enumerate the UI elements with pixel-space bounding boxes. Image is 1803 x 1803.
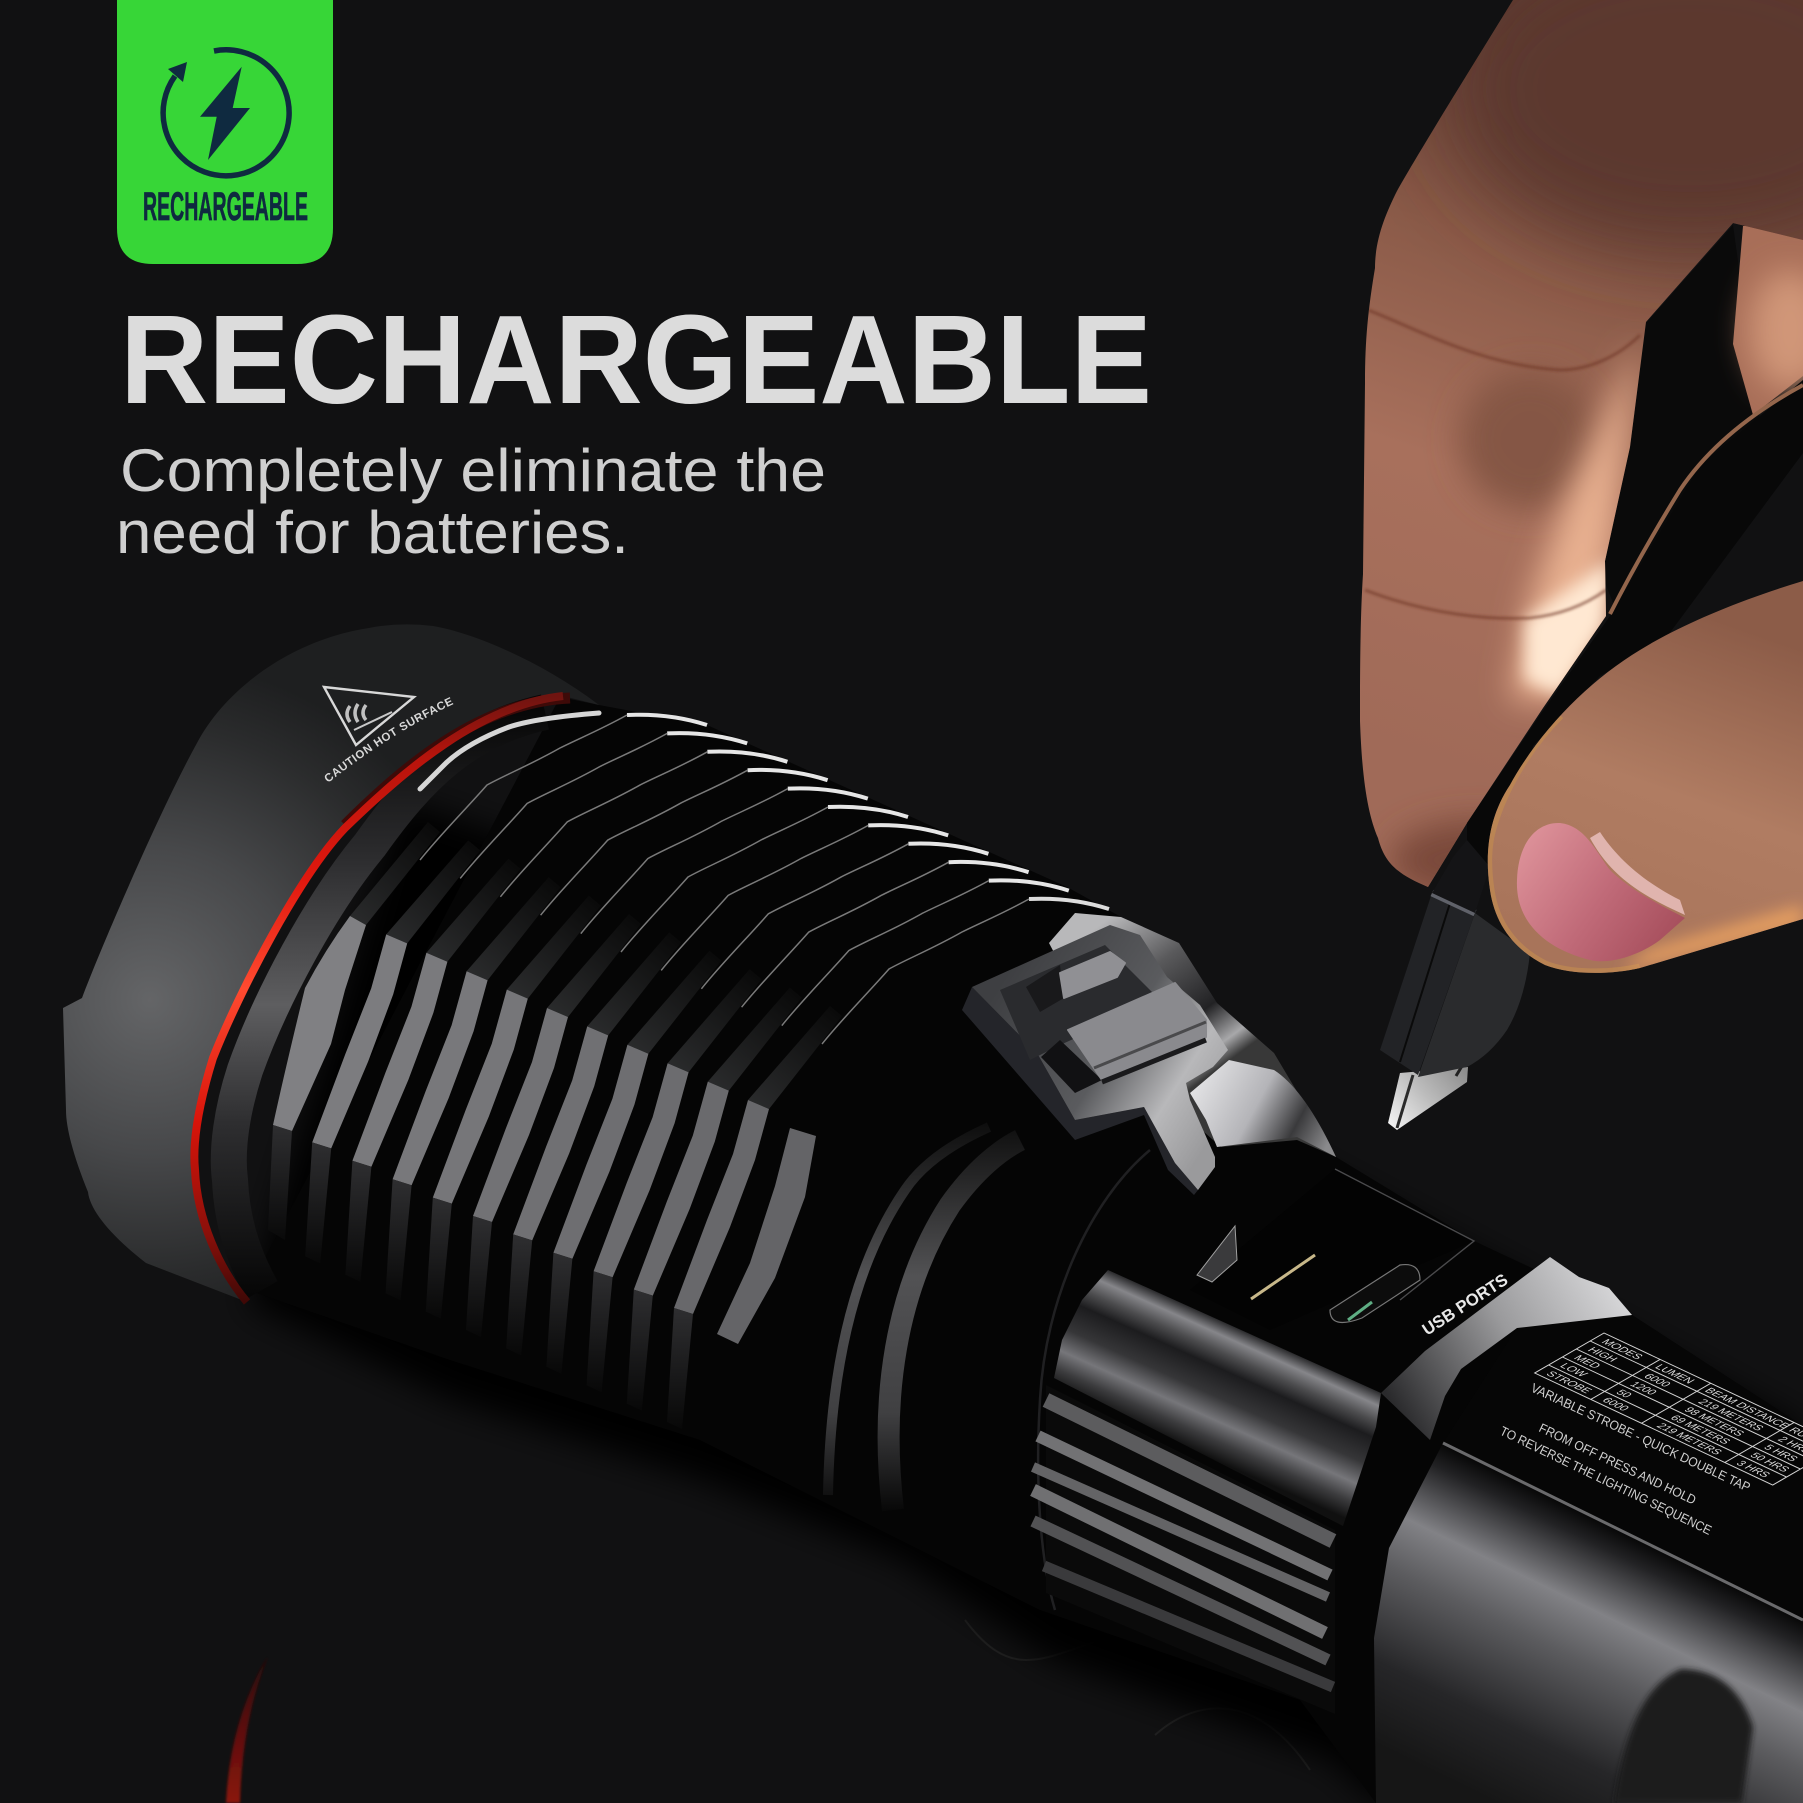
subtitle: need for batteries. [116, 499, 629, 566]
hand holding cable [1350, 0, 1803, 1130]
switch plate [962, 925, 1228, 1195]
fingernail [1517, 823, 1685, 961]
large power button [1041, 983, 1206, 1093]
label plate on barrel [1443, 1315, 1803, 1620]
mode specification table: 1200 [1627, 1380, 1659, 1397]
grooved section [1033, 1385, 1335, 1714]
mode specification table: 5 HRS [1761, 1443, 1800, 1463]
mode specification table: HIGH [1584, 1346, 1620, 1364]
barrel oval shadow [1614, 1669, 1753, 1803]
USB PORTS label: USB PORTS [1419, 1270, 1511, 1339]
flashlight body soft lower edge [248, 800, 1803, 1803]
thumb tip rim [1488, 715, 1640, 973]
fin 7 [506, 825, 948, 1355]
cooling fins [268, 715, 1109, 1429]
small port [1197, 1226, 1237, 1282]
fin 10 [627, 880, 1069, 1411]
rear barrel [1374, 1443, 1803, 1803]
red ring [194, 696, 570, 1302]
switch plate face [972, 925, 1228, 1190]
silver body behind switch [1049, 913, 1336, 1157]
mode specification table [1535, 1333, 1803, 1487]
barrel top line [1443, 1443, 1803, 1620]
USB connector [1380, 840, 1530, 1130]
fin 3 [345, 752, 787, 1282]
badge: RECHARGEABLE [143, 185, 308, 229]
connector metal tip [1388, 1066, 1468, 1130]
collar band behind red ring [229, 712, 545, 1290]
mode specification table: 50 HRS [1747, 1451, 1792, 1474]
barrel instruction text [1498, 1380, 1753, 1538]
first ring highlight [420, 713, 599, 789]
mode specification table: LUMEN [1652, 1363, 1697, 1385]
badge [117, 0, 333, 264]
fin 1 [268, 715, 707, 1240]
red floor reflection [226, 1656, 268, 1803]
index finger [1350, 0, 1803, 900]
mode specification table: 69 METERS [1667, 1414, 1733, 1446]
icon: lightning bolt [200, 67, 250, 160]
mid grip section [1054, 1270, 1381, 1526]
barrel instruction text: TO REVERSE THE LIGHTING SEQUENCE [1498, 1423, 1714, 1538]
connector neck [1432, 840, 1490, 913]
subtitle [116, 437, 826, 566]
mode specification table: 6000 [1641, 1372, 1673, 1389]
icon: recharge arrow circle [163, 50, 289, 176]
main port gold pins [1251, 1255, 1315, 1299]
mode specification table: STROBE [1543, 1370, 1594, 1395]
USB port panel [1190, 1169, 1474, 1330]
subtitle: Completely eliminate the [120, 437, 826, 504]
switch recess [1000, 945, 1160, 1060]
head bezel [63, 624, 599, 1302]
thumb underside glow [1620, 905, 1803, 972]
faint cable loops on the floor [965, 1620, 1310, 1770]
mode specification table: 3 HRS [1733, 1459, 1773, 1479]
connector rear lobe [1418, 913, 1530, 1077]
dark gap between fingers [1600, 225, 1760, 620]
fin 2 [305, 733, 747, 1263]
fin 8 [546, 844, 988, 1374]
rear collar arcs [828, 1127, 1150, 1610]
fin 5 [426, 788, 868, 1319]
title: RECHARGEABLE [120, 289, 1152, 430]
silver ring [1381, 1257, 1632, 1440]
middle finger [1733, 226, 1803, 415]
badge background [117, 0, 333, 264]
mode specification table: MED [1571, 1354, 1603, 1370]
switch plate dark rim [962, 987, 1198, 1195]
fin 6 [466, 807, 908, 1337]
barrel instruction text: VARIABLE STROBE - QUICK DOUBLE TAP [1529, 1380, 1753, 1495]
mode specification table: 219 METERS [1653, 1422, 1724, 1457]
flashlight body silhouette [248, 697, 1803, 1803]
charging cable [1467, 380, 1803, 870]
mode specification table: 6000 [1599, 1396, 1631, 1413]
fin 11 [667, 899, 1109, 1429]
mode specification table: 98 METERS [1681, 1406, 1747, 1438]
thumb [1480, 570, 1803, 980]
barrel instruction text: FROM OFF PRESS AND HOLD [1537, 1420, 1699, 1507]
flashlight [63, 624, 1803, 1803]
mode specification table: MODES [1598, 1338, 1645, 1361]
small slider button [1026, 952, 1125, 1012]
mode specification table: BEAM DISTANCE [1701, 1386, 1792, 1430]
knuckle creases [1365, 310, 1640, 618]
fin 9 [587, 862, 1029, 1392]
mode specification table: 219 METERS [1695, 1398, 1766, 1433]
icon: heat warning triangle with caution text: CAUTION HOT SURFACE [324, 697, 454, 782]
fin 12 [717, 1128, 816, 1344]
USB-C port [1330, 1265, 1420, 1322]
connector front boot [1380, 893, 1475, 1075]
silver curved shoulder [1190, 1060, 1336, 1157]
mode specification table: LOW [1557, 1362, 1590, 1379]
fin 4 [386, 770, 828, 1300]
mode specification table: 50 [1613, 1388, 1634, 1400]
